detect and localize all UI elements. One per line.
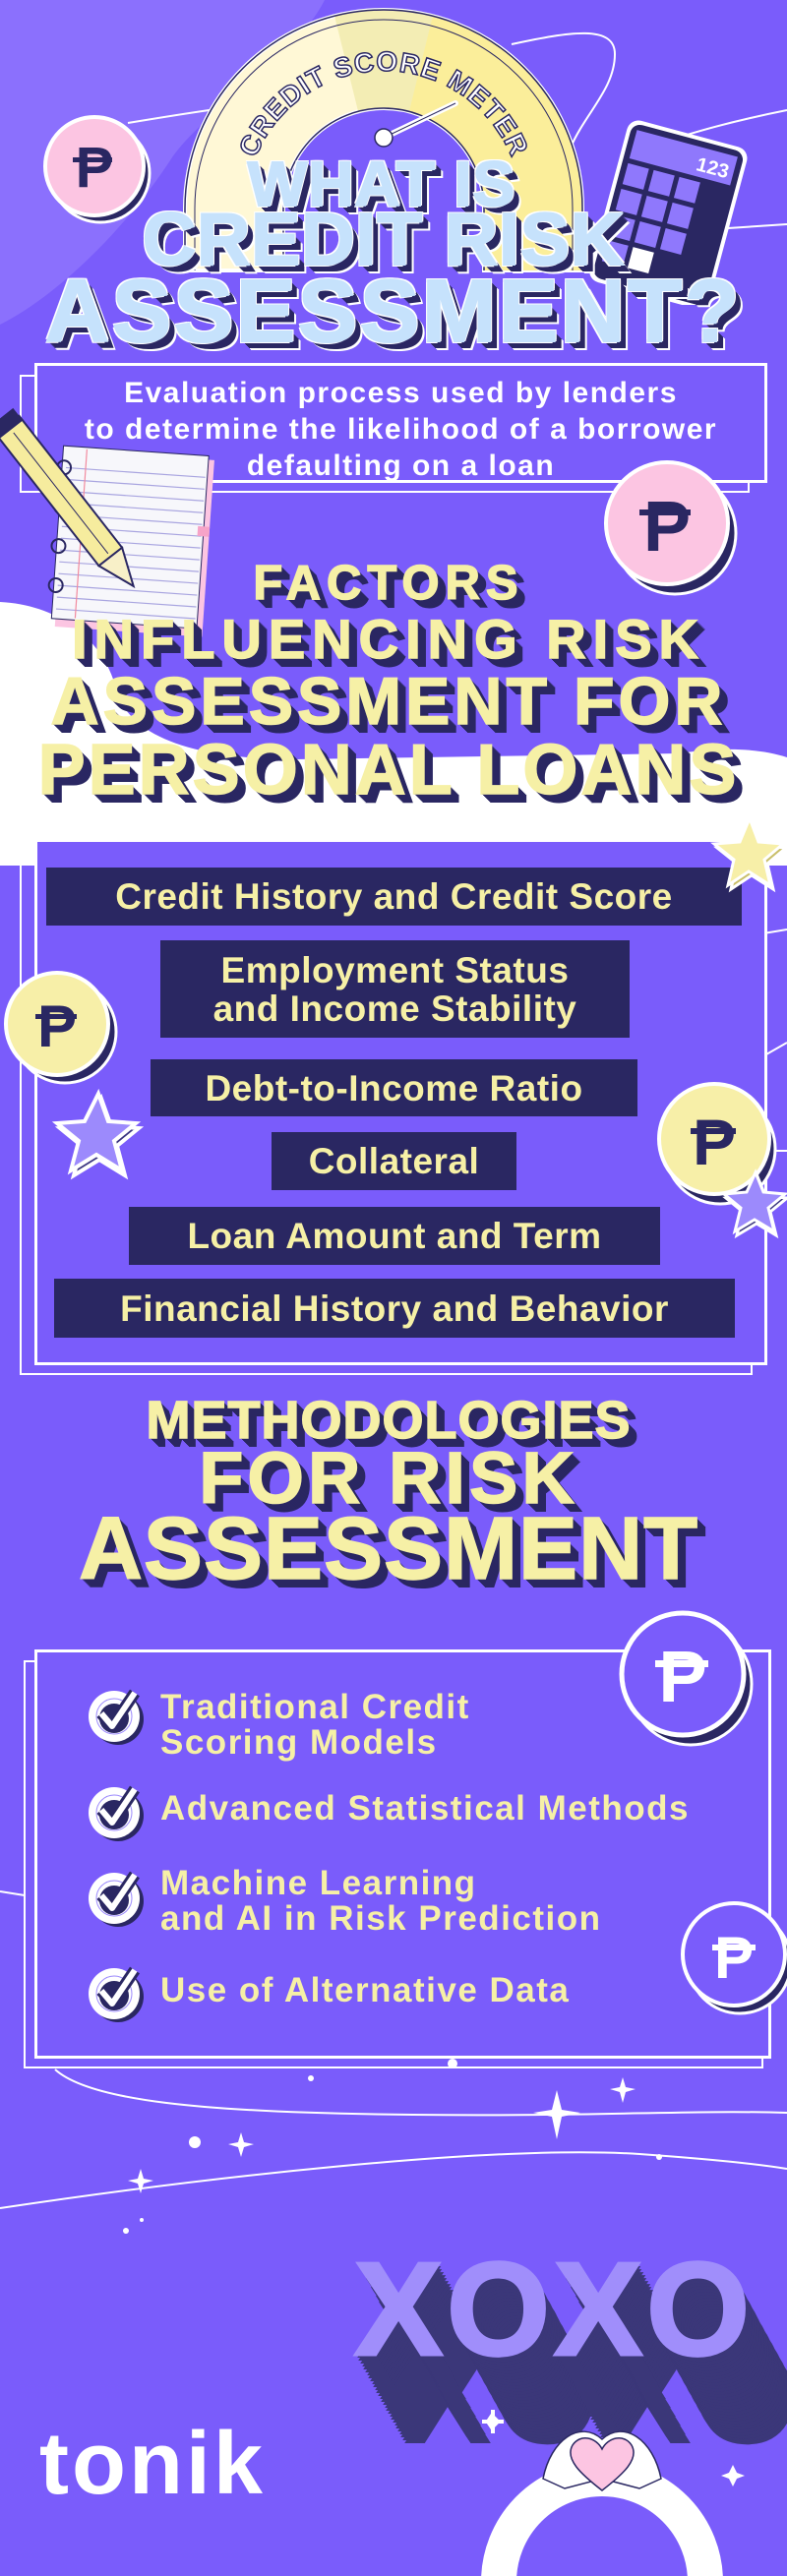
method: traditional: Scoring Models [160,1723,438,1762]
icon: pink coin left [43,115,151,224]
icon: pink coin right [604,460,738,596]
icon: check [89,1786,144,1841]
panel: factors [20,842,767,1375]
factor: employment: and Income Stability [213,988,576,1029]
description text: Evaluation process used by lenders [124,377,678,409]
icon: check [89,1871,144,1927]
title: WHAT IS [248,149,515,219]
icon: purple star left [52,1089,144,1180]
heading: methodologies: ASSESSMENT [79,1500,698,1598]
icon: pink coin right: P [643,488,691,567]
description text [85,377,717,482]
icon: yellow coin left: P [37,993,77,1059]
factor: employment: Employment Status [221,950,569,989]
icon: outline coin bottom [681,1901,787,2014]
icon: outline coin top [620,1611,754,1747]
title: ASSESSMENT? [45,263,742,361]
icon: sparkles [128,2077,636,2193]
icon: check [89,1690,144,1745]
factor: loan amount [129,1207,660,1265]
icon: yellow coin right: P [693,1106,736,1178]
factor: loan amount: Loan Amount and Term [187,1216,602,1256]
description box [20,363,767,493]
factor: collateral: Collateral [309,1141,479,1181]
factor: debt to income: Debt-to-Income Ratio [205,1068,583,1108]
text: credit score meter: CREDIT SCORE METER [240,51,527,158]
icon: pink coin left: P [76,136,113,200]
factor: financial history [54,1279,735,1338]
icon: notebook and pencil [0,407,214,637]
factor: employment [160,940,630,1038]
heading: methodologies [79,1391,706,1598]
icon: heart hands [481,2410,745,2576]
method: traditional [89,1688,470,1762]
title: CREDIT RISK [143,198,625,280]
method: machine learning: Machine Learning [160,1864,477,1902]
icon: calculator: 123 [694,153,731,183]
icon: check [89,1967,144,2022]
panel: methodologies [24,1649,771,2068]
method: advanced statistical [89,1786,690,1841]
icon: yellow coin right [657,1082,777,1206]
factor: credit history: Credit History and Credit Score [115,876,673,917]
heading: factors: PERSONAL LOANS [38,731,739,809]
heading: methodologies: METHODOLOGIES [146,1391,632,1450]
heading: factors: ASSESSMENT FOR [51,664,726,739]
heading: factors: FACTORS [253,557,524,610]
method: alternative data: Use of Alternative Data [160,1971,570,2009]
method: machine learning [89,1864,602,1938]
factor: collateral [272,1132,516,1190]
icon: outline coin top: P [658,1636,707,1717]
xoxo text: XOXO [354,2235,754,2383]
icon: yellow star top right [710,822,783,893]
icon: small purple star right [722,1168,787,1238]
factor: credit history [46,868,742,926]
description text: defaulting on a loan [247,449,555,482]
method: alternative data [89,1967,570,2022]
icon: outline coin bottom: P [714,1925,754,1991]
icon: yellow coin left [4,971,118,1084]
factor: financial history: Financial History and Behavior [120,1288,669,1328]
method: advanced statistical: Advanced Statistical Methods [160,1789,690,1827]
description text: to determine the likelihood of a borrower [85,413,717,446]
title [45,149,743,361]
credit score meter [183,8,584,272]
logo: tonik: tonik [39,2415,266,2513]
method: traditional: Traditional Credit [160,1688,470,1726]
icon: calculator [590,120,748,305]
factor: debt to income [151,1059,637,1116]
heading: factors: INFLUENCING RISK [72,608,705,670]
method: machine learning: and AI in Risk Prediction [160,1899,602,1938]
heading: factors [38,557,743,809]
heading: methodologies: FOR RISK [199,1437,578,1519]
